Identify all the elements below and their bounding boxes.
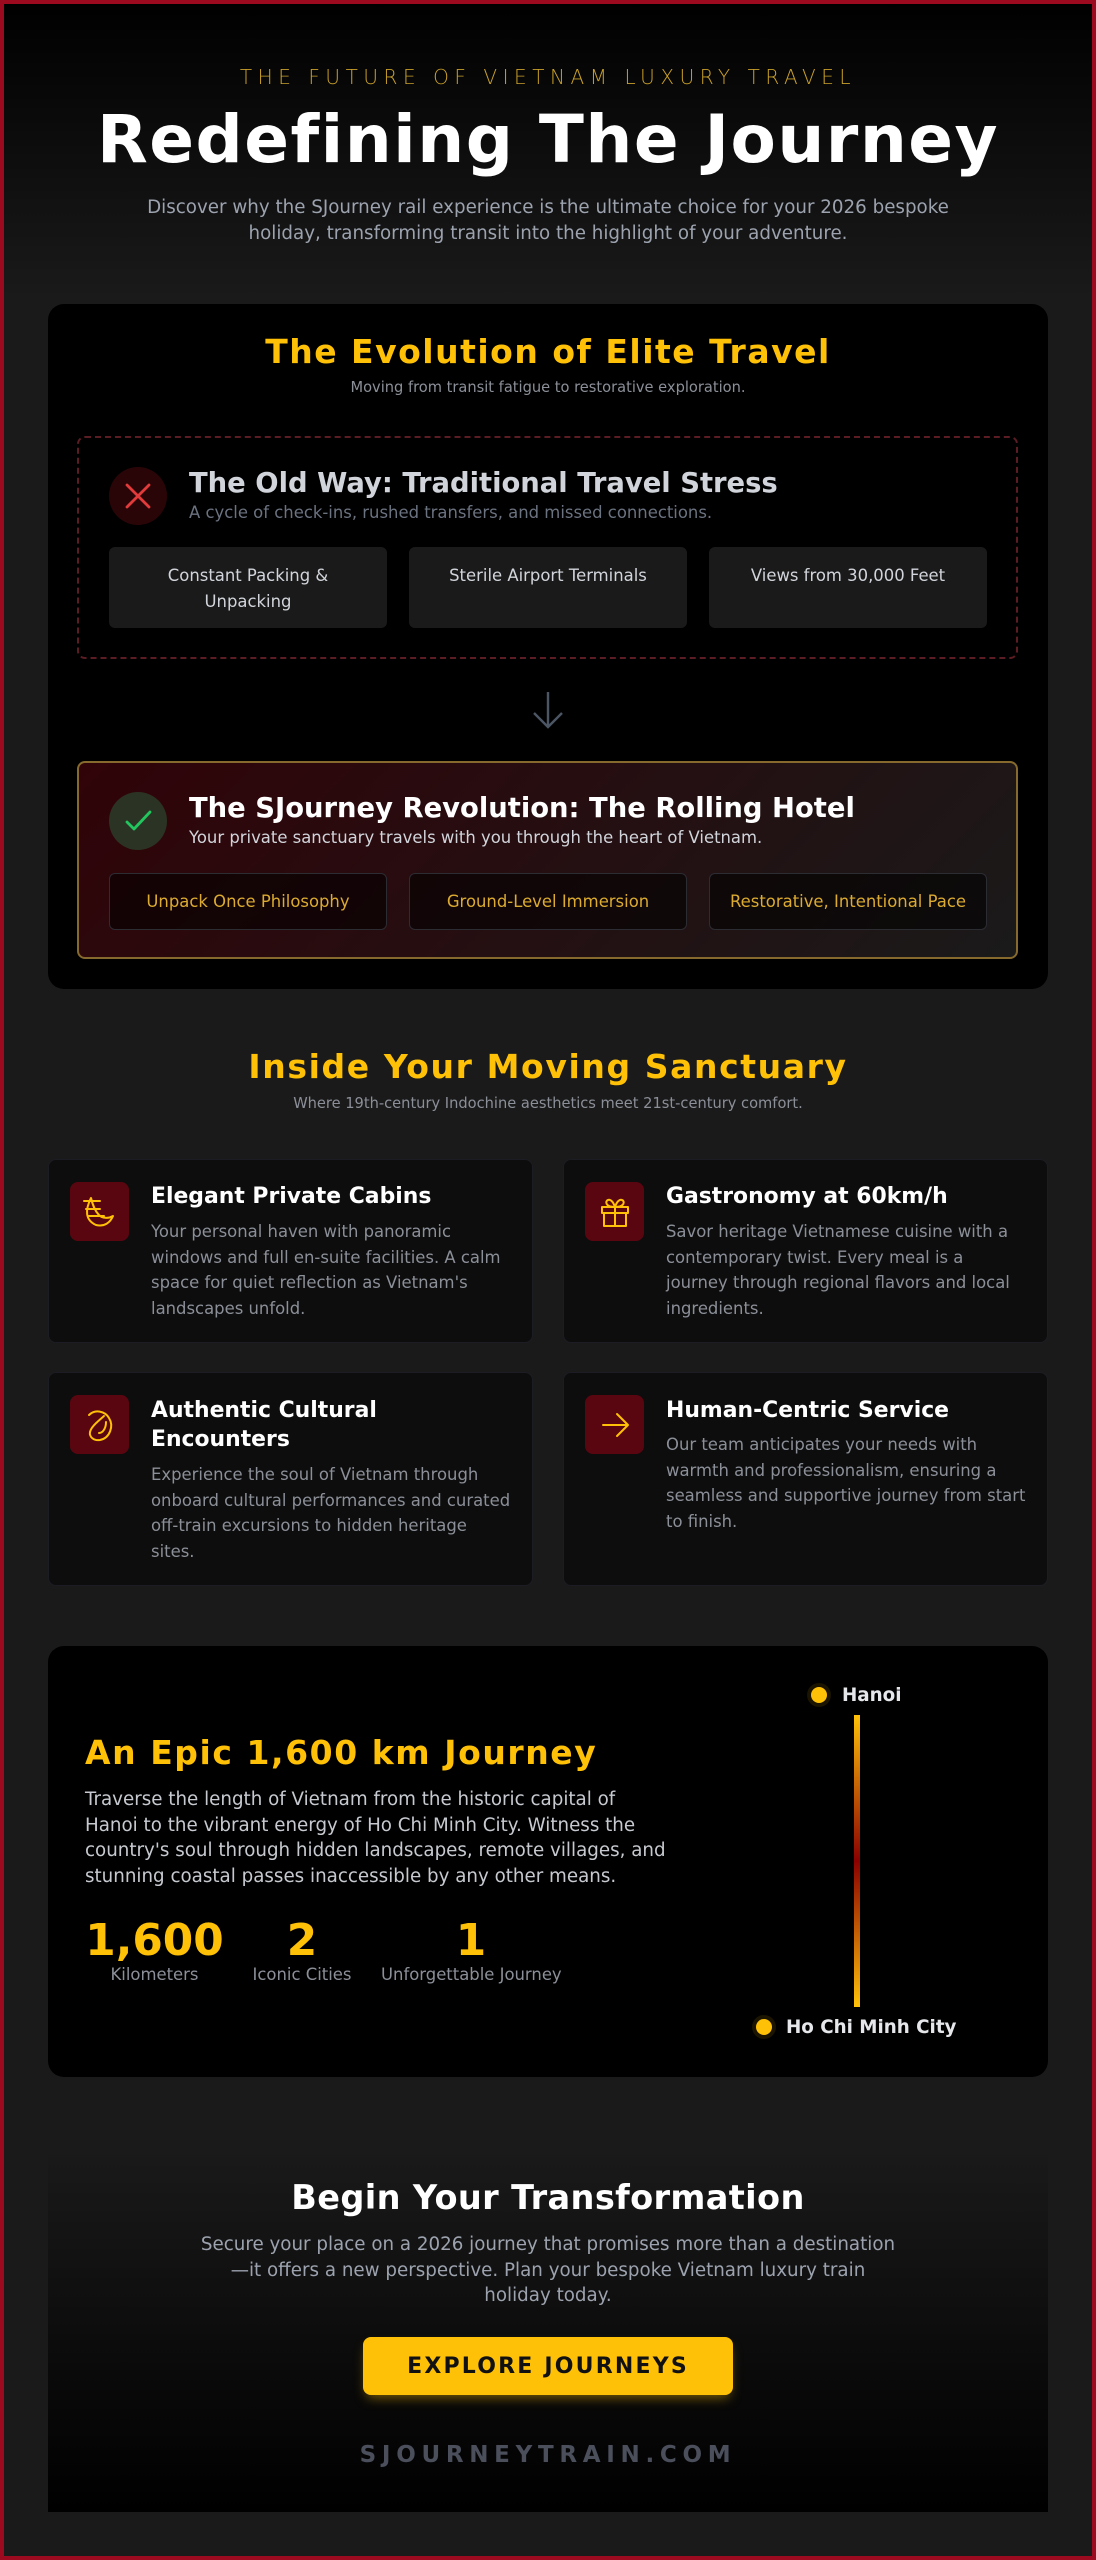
- icon: red cross: [109, 467, 167, 525]
- stat: cities: [253, 1915, 351, 1984]
- title: Encounters: [151, 1427, 290, 1452]
- title: Gastronomy at 60km/h: [666, 1184, 948, 1209]
- website: SJOURNEYTRAIN.COM: [360, 2442, 736, 2468]
- chip: views: Views from 30,000 Feet: [751, 566, 945, 585]
- label: Kilometers: [110, 1965, 198, 1984]
- panel: the evolution of elite travel: [48, 304, 1048, 989]
- title: Redefining The Journey: [97, 101, 999, 178]
- chip: restorative: [709, 873, 987, 930]
- paragraph: Secure your place on a 2026 journey that promises more than a destination: [201, 2234, 895, 2255]
- HCMC label: Ho Chi Minh City: [786, 2017, 956, 2038]
- chip: views: [709, 547, 987, 628]
- heading: An Epic 1,600 km Journey: [85, 1733, 597, 1772]
- stat: kilometers: [85, 1915, 224, 1984]
- heading: Inside Your Moving Sanctuary: [248, 1047, 848, 1086]
- arrow: down: [533, 692, 563, 729]
- icon: arrow right: [585, 1395, 644, 1454]
- title: Authentic Cultural: [151, 1398, 377, 1423]
- subtitle: holiday, transforming transit into the highlight of your adventure.: [248, 223, 847, 244]
- body: to finish.: [666, 1512, 737, 1531]
- panel: epic journey: [48, 1646, 1048, 2077]
- old way title: The Old Way: Traditional Travel Stress: [189, 468, 778, 499]
- button: EXPLORE JOURNEYS: [407, 2354, 689, 2379]
- body: warmth and professionalism, ensuring a: [666, 1461, 996, 1480]
- paragraph: Traverse the length of Vietnam from the historic capital of: [85, 1789, 615, 1810]
- body: journey through regional flavors and local: [666, 1273, 1010, 1292]
- body: Savor heritage Vietnamese cuisine with a: [666, 1222, 1008, 1241]
- icon: gift: [585, 1182, 644, 1241]
- panel: the old way: [77, 436, 1018, 659]
- section heading: inside your moving sanctuary: [248, 1047, 848, 1112]
- body: off-train excursions to hidden heritage: [151, 1516, 467, 1535]
- subheading: Where 19th-century Indochine aesthetics meet 21st-century comfort.: [293, 1095, 803, 1112]
- body: landscapes unfold.: [151, 1299, 305, 1318]
- body: Our team anticipates your needs with: [666, 1435, 977, 1454]
- heading: Begin Your Transformation: [291, 2178, 805, 2217]
- icon: green check: [109, 792, 167, 850]
- chip: unpack once: [109, 873, 387, 930]
- body: [666, 1435, 1026, 1531]
- body: space for quiet reflection as Vietnam's: [151, 1273, 468, 1292]
- paragraph: country's soul through hidden landscapes, remote villages, and: [85, 1840, 666, 1861]
- paragraph: stunning coastal passes inaccessible by any other means.: [85, 1866, 616, 1887]
- body: ingredients.: [666, 1299, 764, 1318]
- eyebrow: THE FUTURE OF VIETNAM LUXURY TRAVEL: [240, 65, 856, 89]
- title: [151, 1398, 377, 1452]
- chip: unpack once: Unpack Once Philosophy: [146, 892, 350, 911]
- icon: leaf loop: [70, 1395, 129, 1454]
- number: 1,600: [85, 1915, 224, 1966]
- title: Human-Centric Service: [666, 1398, 949, 1423]
- panel: the sjourney revolution: [77, 761, 1018, 959]
- card: private cabins: [48, 1159, 533, 1343]
- card: human-centric service: [563, 1372, 1048, 1586]
- chip: restorative: Restorative, Intentional Pace: [730, 892, 966, 911]
- chip: ground level: Ground-Level Immersion: [447, 892, 649, 911]
- subtitle: Discover why the SJourney rail experience is the ultimate choice for your 2026 bespoke: [147, 197, 949, 218]
- revolution subtitle: Your private sanctuary travels with you through the heart of Vietnam.: [189, 828, 762, 847]
- chip: packing: [109, 547, 387, 628]
- revolution title: The SJourney Revolution: The Rolling Hotel: [189, 793, 855, 824]
- route: Hanoi to Ho Chi Minh City: [752, 1683, 956, 2039]
- label: Iconic Cities: [253, 1965, 351, 1984]
- body: [151, 1465, 510, 1561]
- body: [151, 1222, 501, 1318]
- HCMC dot: [756, 2019, 772, 2035]
- body: onboard cultural performances and curated: [151, 1491, 510, 1510]
- card: cultural encounters: [48, 1372, 533, 1586]
- old way subtitle: A cycle of check-ins, rushed transfers, and missed connections.: [189, 503, 712, 522]
- stat: journey: [381, 1915, 562, 1984]
- chip: ground level: [409, 873, 687, 930]
- paragraph: holiday today.: [484, 2285, 612, 2306]
- Hanoi label: Hanoi: [842, 1685, 901, 1706]
- chip: terminals: Sterile Airport Terminals: [449, 566, 647, 585]
- number: 1: [456, 1915, 486, 1966]
- Hanoi dot: [811, 1687, 827, 1703]
- card: gastronomy: [563, 1159, 1048, 1343]
- body: Experience the soul of Vietnam through: [151, 1465, 478, 1484]
- body: contemporary twist. Every meal is a: [666, 1248, 963, 1267]
- heading: The Evolution of Elite Travel: [265, 332, 831, 371]
- body: [666, 1222, 1010, 1318]
- body: windows and full en-suite facilities. A calm: [151, 1248, 501, 1267]
- button: [363, 2337, 733, 2395]
- paragraph: —it offers a new perspective. Plan your bespoke Vietnam luxury train: [231, 2260, 865, 2281]
- paragraph: [84, 1789, 666, 1887]
- subtitle: [147, 197, 949, 244]
- body: sites.: [151, 1542, 194, 1561]
- number: 2: [287, 1915, 317, 1966]
- chip: terminals: [409, 547, 687, 628]
- paragraph: [201, 2234, 895, 2306]
- chip: packing: Constant Packing &: [168, 566, 328, 585]
- subheading: Moving from transit fatigue to restorative exploration.: [350, 379, 746, 396]
- route line: [854, 1715, 860, 2007]
- paragraph: Hanoi to the vibrant energy of Ho Chi Minh City. Witness the: [85, 1815, 635, 1836]
- panel: call to action: [48, 2147, 1048, 2512]
- header: [97, 65, 999, 244]
- title: Elegant Private Cabins: [151, 1184, 431, 1209]
- body: seamless and supportive journey from start: [666, 1486, 1025, 1505]
- chip: packing: Unpacking: [205, 592, 291, 611]
- body: Your personal haven with panoramic: [151, 1222, 451, 1241]
- label: Unforgettable Journey: [381, 1965, 562, 1984]
- icon: boat: [70, 1182, 129, 1241]
